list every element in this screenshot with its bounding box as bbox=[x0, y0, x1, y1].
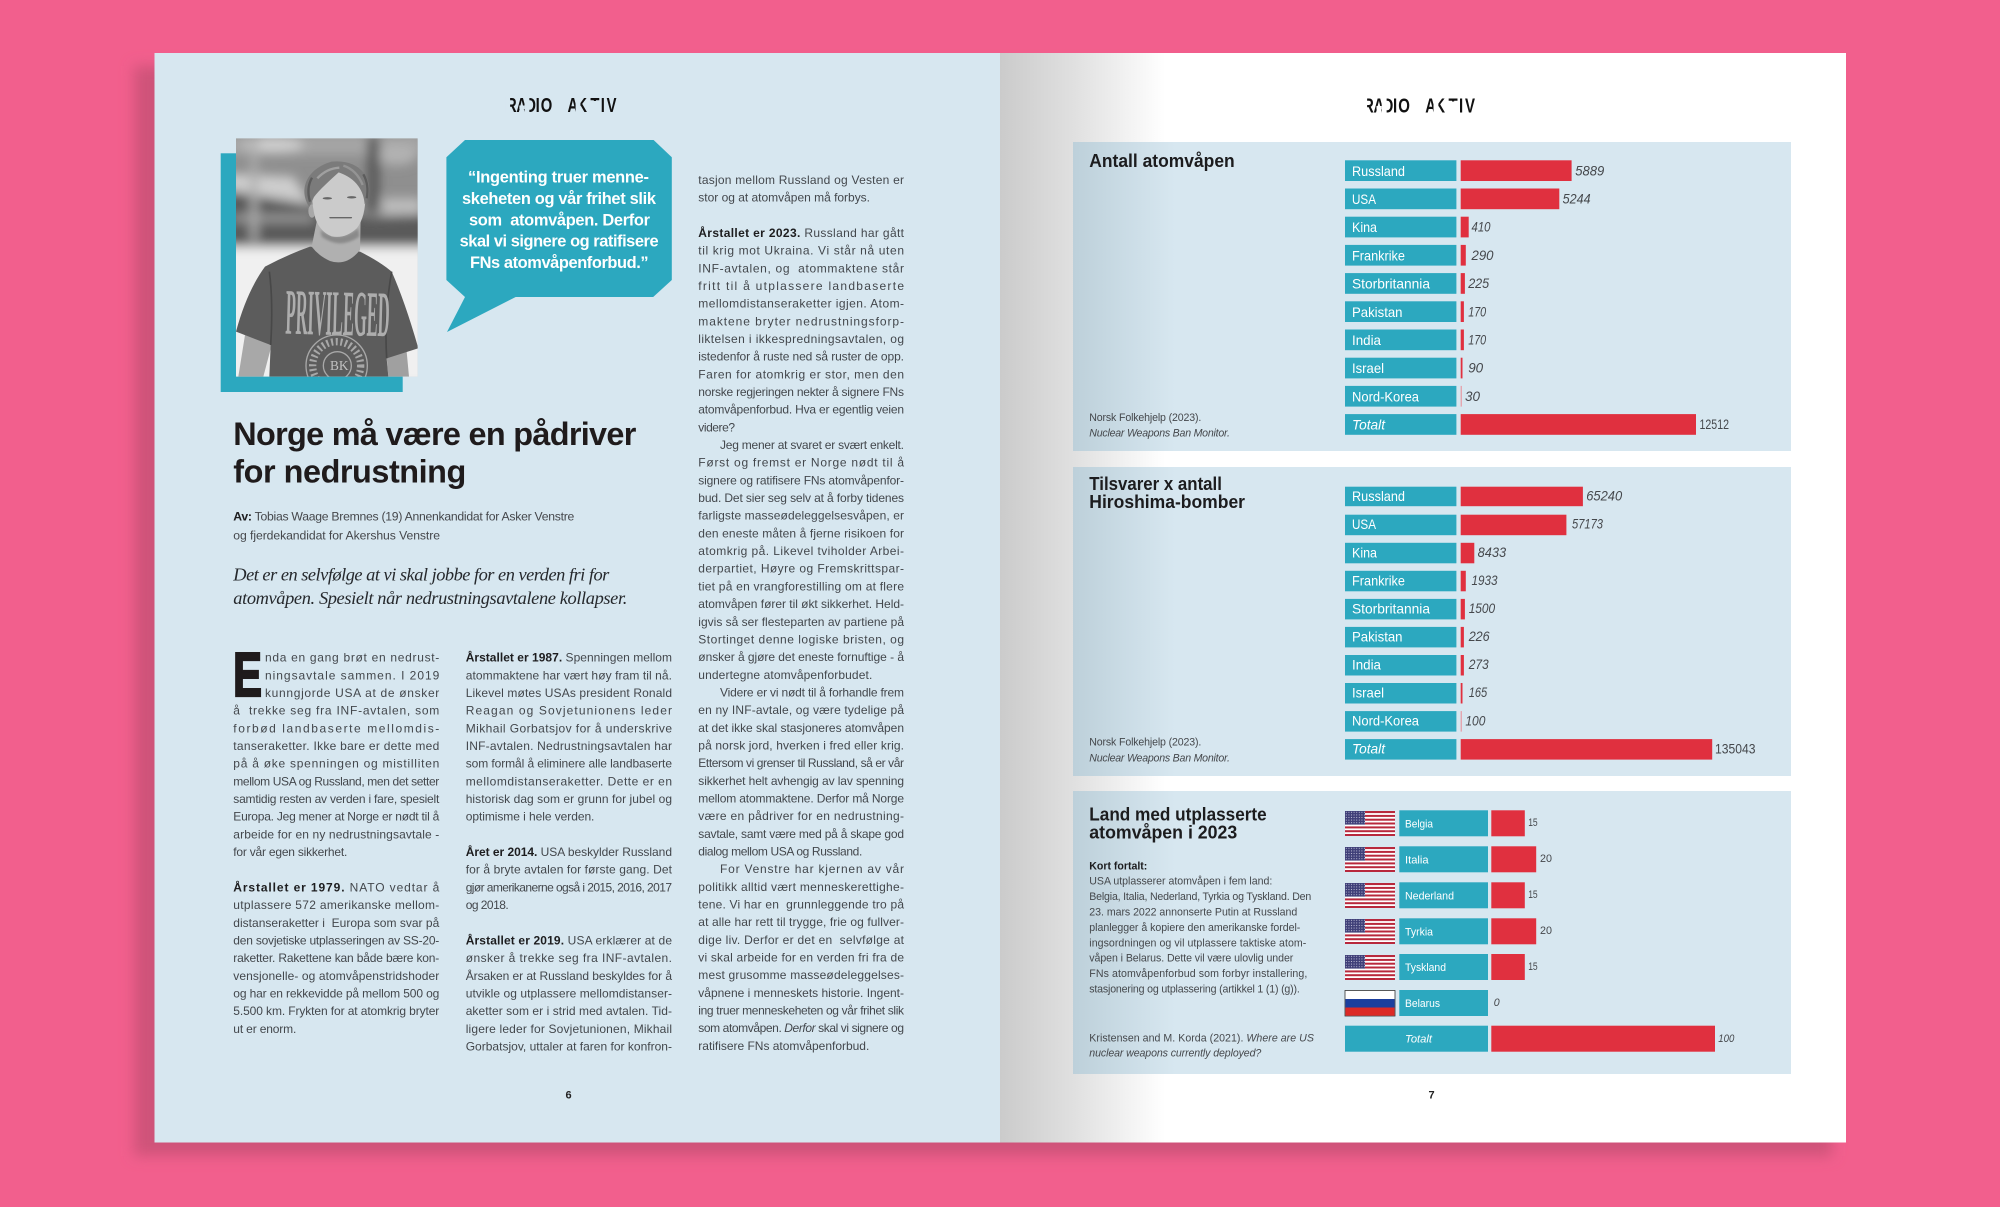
row: Kina 410 bbox=[1345, 217, 1491, 237]
portrait backing block bbox=[221, 153, 403, 392]
article column 3: tene. Vi har en grunnleggende tro på bbox=[698, 898, 904, 912]
row: Italia 20 bbox=[1345, 846, 1552, 872]
eyes and smile bbox=[323, 196, 356, 199]
row: Italia 20: Italia bbox=[1405, 854, 1429, 866]
row: Israel 165: 165 bbox=[1469, 685, 1488, 700]
article column 3: som atomvåpen. Derfor skal vi signere og bbox=[698, 1021, 904, 1035]
row: Tyskland 15: Tyskland bbox=[1405, 962, 1446, 974]
article column 3: fritt til å utplassere landbaserte bbox=[698, 279, 904, 293]
article column 3: Årstallet er 2023. Russland har gått bbox=[698, 225, 905, 240]
row: Frankrike 1933: 1933 bbox=[1472, 573, 1498, 588]
article column 1: raketter. Rakettene kan både bære kon- bbox=[233, 951, 439, 965]
row: Tyrkia 20 bbox=[1345, 918, 1552, 944]
article column 3: stor og at atomvåpen må forbys. bbox=[698, 191, 870, 205]
row: Frankrike 290: Frankrike bbox=[1352, 247, 1405, 263]
row: Totalt 100: Totalt bbox=[1405, 1034, 1433, 1046]
article column 3: Jeg mener at svaret er svært enkelt. bbox=[720, 438, 904, 452]
article column 1: ningsavtale sammen. I 2019 bbox=[265, 668, 440, 682]
right page bbox=[1000, 53, 1846, 1142]
article column 2: Året er 2014. USA beskylder Russland bbox=[466, 844, 672, 859]
row: India 170 bbox=[1345, 330, 1487, 350]
article column 1: vensjonelle- og atomvåpenstridshoder bbox=[233, 969, 439, 983]
row: Storbritannia 1500 bbox=[1345, 599, 1496, 619]
text: Kort fortalt: 23. mars 2022 annonserte Putin at Russland bbox=[1089, 906, 1297, 918]
lead paragraph bbox=[232, 565, 627, 608]
article column 2: Gorbatsjov, uttaler at faren for konfron- bbox=[466, 1039, 672, 1053]
row: Israel 165 bbox=[1345, 683, 1488, 704]
hair bbox=[304, 161, 369, 207]
magazine shadow bbox=[134, 66, 1832, 1156]
shirt crest bbox=[305, 334, 368, 377]
drop cap: E bbox=[233, 641, 262, 710]
text: Kort fortalt: FNs atomvåpenforbud som forbyr installering, bbox=[1089, 968, 1307, 980]
row: Russland 5889 bbox=[1345, 160, 1605, 181]
article column 2: Årsaken er at Russland beskyldes for å bbox=[466, 968, 672, 983]
row: Tyrkia 20: Tyrkia bbox=[1405, 926, 1434, 938]
article column 3: ing truer menneskeheten og vår frihet slik bbox=[698, 1004, 905, 1018]
article column 1: 5.500 km. Frykten for at atomkrig bryter bbox=[233, 1004, 439, 1018]
row: Belgia 15: 15 bbox=[1528, 817, 1538, 829]
row: Totalt 100: 100 bbox=[1718, 1033, 1734, 1045]
article column 1: ut er enorm. bbox=[233, 1022, 296, 1036]
row: Russland 65240: Russland bbox=[1352, 488, 1405, 504]
quote bubble: FNs atomvåpenforbud.” bbox=[470, 254, 649, 272]
article column 3: derpartiet, Høyre og Fremskrittspar- bbox=[698, 562, 904, 576]
text: Kort fortalt: ingsordningen og vil utplassere taktiske atom- bbox=[1089, 937, 1307, 949]
article column 2: ønsker å trekke seg fra INF-avtalen. bbox=[466, 951, 672, 965]
panel: Land med utplasserte atomvåpen i 2023: Land med utplasserte bbox=[1089, 804, 1267, 825]
article column 3: savtale, samt være med på å skape god bbox=[698, 827, 904, 841]
row: Frankrike 1933 bbox=[1345, 571, 1498, 591]
row: Totalt 12512 bbox=[1345, 414, 1729, 435]
article column 2: som formål å eliminere alle landbaserte bbox=[466, 757, 672, 771]
row: Russland 5889: 5889 bbox=[1575, 163, 1605, 178]
hair strands bbox=[308, 166, 367, 202]
row: Russland 5889: Russland bbox=[1352, 163, 1405, 179]
row: Frankrike 1933: Frankrike bbox=[1352, 572, 1405, 588]
article column 3: mellomdistanseraketter igjen. Atom- bbox=[698, 297, 904, 311]
article column 3: maktene bryter nedrustningsforp- bbox=[698, 314, 904, 328]
row: Tyrkia 20: 20 bbox=[1540, 925, 1552, 937]
row: Tyskland 15 bbox=[1345, 954, 1538, 980]
row: Pakistan 226 bbox=[1345, 627, 1490, 647]
masthead left: Radio Aktiv: RADIOAKTIV bbox=[506, 94, 617, 117]
row: Kina 8433: Kina bbox=[1352, 544, 1377, 560]
article column 3: videre? bbox=[698, 420, 735, 434]
article column 1: kunngjorde USA at de ønsker bbox=[265, 686, 439, 700]
row: Totalt 135043: 135043 bbox=[1715, 741, 1756, 756]
article column 3: atomvåpen fører til økt sikkerhet. Held- bbox=[698, 597, 904, 611]
source note bbox=[1089, 737, 1230, 764]
row: USA 57173: 57173 bbox=[1572, 517, 1603, 532]
article column 3: politikk alltid vært menneskerettighe- bbox=[698, 880, 904, 894]
text: Kort fortalt bbox=[1089, 860, 1311, 996]
row: India 170: India bbox=[1352, 332, 1381, 348]
panel: Land med utplasserte atomvåpen i 2023: atomvåpen i 2023 bbox=[1089, 822, 1237, 843]
row: Totalt 12512: 12512 bbox=[1700, 417, 1729, 432]
row: Italia 20: 20 bbox=[1540, 853, 1552, 865]
article column 3: at alle har rett til trygge, frie og fullver- bbox=[698, 915, 904, 929]
article column 3: tasjon mellom Russland og Vesten er bbox=[698, 173, 904, 187]
article column 3: norske regjeringen nekter å signere FNs bbox=[698, 385, 904, 399]
row: Israel 90: Israel bbox=[1352, 360, 1384, 376]
article column 1: utplassere 572 amerikanske mellom- bbox=[233, 898, 439, 912]
text: Kort fortalt: USA utplasserer atomvåpen i fem land: bbox=[1089, 876, 1272, 888]
source note: Nuclear Weapons Ban Monitor. bbox=[1089, 428, 1230, 440]
masthead right: Radio Aktiv: RADIOAKTIV bbox=[1363, 94, 1475, 117]
row: Pakistan 226: 226 bbox=[1468, 629, 1490, 644]
article column 2: Årstallet er 2019. USA erklærer at de bbox=[466, 932, 672, 947]
sleeve seams bbox=[269, 272, 392, 358]
text: Kort fortalt: Kort fortalt: bbox=[1089, 860, 1147, 872]
article column 3: istedenfor å ruste ned så ruster de opp. bbox=[698, 350, 904, 364]
article column 2: ligere leder for Sovjetunionen, Mikhail bbox=[466, 1022, 672, 1036]
row: Nord-Korea 30: 30 bbox=[1465, 389, 1480, 404]
article column 2: og 2018. bbox=[466, 898, 509, 912]
page number 7: 7 bbox=[1428, 1090, 1435, 1102]
row: Russland 65240 bbox=[1345, 487, 1623, 506]
article column 2: Mikhail Gorbatsjov for å underskrive bbox=[466, 721, 672, 735]
row: USA 5244: 5244 bbox=[1563, 192, 1591, 206]
article column 3: ratifisere FNs atomvåpenforbud. bbox=[698, 1039, 869, 1053]
article column 3: atomkrig på. Likevel tviholder Arbei- bbox=[698, 544, 904, 558]
article column 3: sikkerhet helt avhengig av lav spenning bbox=[698, 774, 904, 788]
row: Pakistan 170: 170 bbox=[1468, 304, 1487, 319]
panel: Land med utplasserte atomvåpen i 2023 bbox=[1073, 791, 1791, 1074]
article column 3: tiet på en vrangforestilling om at flere bbox=[698, 579, 904, 593]
face bbox=[312, 172, 365, 237]
row: Israel 90: 90 bbox=[1468, 361, 1484, 376]
article column 1 bbox=[233, 651, 440, 1036]
article column 3: mest grusomme masseødeleggelses- bbox=[698, 968, 904, 982]
row: Storbritannia 225: 225 bbox=[1467, 276, 1490, 291]
article column 3: på norsk jord, hverken i fred eller krig. bbox=[698, 738, 904, 752]
row: Israel 90 bbox=[1345, 358, 1484, 378]
row: Belarus 0: Belarus bbox=[1405, 998, 1440, 1010]
row: India 273: India bbox=[1352, 656, 1381, 672]
row: Kina 8433: 8433 bbox=[1478, 545, 1507, 560]
article column 3: Videre er vi nødt til å forhandle frem bbox=[720, 685, 904, 699]
row: USA 5244 bbox=[1345, 188, 1591, 209]
row: Pakistan 170 bbox=[1345, 301, 1487, 322]
article column 2: gjør amerikanerne også i 2015, 2016, 2017 bbox=[466, 880, 672, 894]
article column 2: aketter som er i strid med avtalen. Tid- bbox=[466, 1004, 672, 1018]
row: Pakistan 170: Pakistan bbox=[1352, 304, 1402, 320]
article column 2: Likevel møtes USAs president Ronald bbox=[466, 686, 672, 700]
lead paragraph: atomvåpen. Spesielt når nedrustningsavtalene kollapser. bbox=[233, 588, 627, 608]
article column 2: optimisme i hele verden. bbox=[466, 810, 594, 824]
article column 3: være en pådriver for en nedrustning- bbox=[698, 809, 904, 823]
article column 1: å trekke seg fra INF-avtalen, som bbox=[233, 704, 439, 718]
row: Nord-Korea 100 bbox=[1345, 711, 1486, 732]
row: Kina 8433 bbox=[1345, 543, 1507, 563]
panel: Tilsvarer x antall Hiroshima-bomber: Tilsvarer x antall bbox=[1089, 473, 1222, 494]
left arm bbox=[238, 335, 272, 377]
article column 3: dialog mellom USA og Russland. bbox=[698, 844, 862, 858]
row: Storbritannia 1500: 1500 bbox=[1469, 601, 1496, 616]
article column 3: Ettersom vi grenser til Russland, så er vår bbox=[698, 756, 904, 770]
article column 1: og har en rekkevidde på mellom 500 og bbox=[233, 986, 439, 1000]
title: Norge må være en pådriver bbox=[233, 416, 637, 452]
article column 2: mellomdistanseraketter. Dette er en bbox=[466, 774, 672, 788]
text: Kort fortalt: planlegger å kopiere den amerikanske fordel- bbox=[1089, 922, 1301, 934]
row: Kina 410: Kina bbox=[1352, 219, 1377, 235]
right arm bbox=[387, 352, 409, 377]
row: Belarus 0: 0 bbox=[1494, 997, 1500, 1009]
article column 2: for å bryte avtalen for første gang. Det bbox=[466, 863, 673, 877]
row: Kina 410: 410 bbox=[1472, 220, 1491, 235]
panel: Tilsvarer x antall Hiroshima-bomber: Hiroshima-bomber bbox=[1089, 491, 1245, 512]
panel: Tilsvarer x antall Hiroshima-bomber bbox=[1073, 467, 1791, 776]
article column 3: vi skal arbeide for en verden fri fra de bbox=[698, 950, 904, 964]
source note bbox=[1089, 412, 1230, 440]
article column 2: atommaktene har vært høy fram til nå. bbox=[466, 668, 672, 682]
byline: og fjerdekandidat for Akershus Venstre bbox=[233, 528, 440, 542]
article column 3: igvis så ser flesteparten av partiene på bbox=[698, 615, 904, 629]
byline: Av: Tobias Waage Bremnes (19) Annenkandidat for Asker Venstre bbox=[233, 510, 575, 524]
article column 3: mellom atommaktene. Derfor må Norge bbox=[698, 792, 904, 806]
row: Tyskland 15: 15 bbox=[1528, 961, 1538, 973]
row: Israel 165: Israel bbox=[1352, 684, 1384, 700]
article column 3: den eneste måten å fjerne risikoen for bbox=[698, 526, 904, 540]
article column 1: tanseraketter. Ikke bare er dette med bbox=[233, 739, 439, 753]
article column 1: distanseraketter i Europa som svar på bbox=[233, 916, 440, 930]
neck bbox=[312, 218, 361, 262]
article column 2: INF-avtalen. Nedrustningsavtalen har bbox=[466, 739, 672, 753]
article column 3: Stortinget denne logiske bristen, og bbox=[698, 632, 904, 646]
row: USA 5244: USA bbox=[1352, 191, 1377, 207]
row: Frankrike 290: 290 bbox=[1471, 248, 1494, 263]
text: Kort fortalt: Belgia, Italia, Nederland, Tyrkia og Tyskland. Den bbox=[1089, 891, 1311, 903]
article column 3: atomvåpenforbud. Hva er egentlig veien bbox=[698, 403, 904, 417]
article column 3: bud. Det sier seg selv at å forby tidenes bbox=[698, 491, 904, 505]
article column 2: utvikle og utplassere mellomdistanser- bbox=[466, 986, 672, 1000]
left page bbox=[154, 53, 1000, 1142]
text: PRIVILEGED bbox=[285, 277, 391, 351]
t-shirt bbox=[236, 247, 418, 377]
article column 1: Europa. Jeg mener at Norge er nødt til å bbox=[233, 810, 440, 824]
text: Kort fortalt: stasjonering og utplassering (artikkel 1 (1) (g)). bbox=[1089, 984, 1300, 996]
row: India 273 bbox=[1345, 655, 1489, 676]
source note bbox=[1089, 1033, 1314, 1060]
article column 1: samtidig resten av verden i fare, spesielt bbox=[233, 792, 440, 806]
panel: Antall atomvåpen: Antall atomvåpen bbox=[1089, 150, 1235, 171]
text: Kort fortalt: våpen i Belarus. Dette vil være ulovlig under bbox=[1089, 953, 1294, 965]
row: Nord-Korea 30 bbox=[1345, 386, 1480, 407]
row: Frankrike 290 bbox=[1345, 245, 1494, 266]
row: Belgia 15: Belgia bbox=[1405, 818, 1434, 830]
quote bubble: skal vi signere og ratifisere bbox=[460, 233, 659, 251]
source note: nuclear weapons currently deployed? bbox=[1089, 1048, 1261, 1060]
row: Totalt 100 bbox=[1345, 1026, 1734, 1052]
row: Nord-Korea 100: 100 bbox=[1465, 713, 1486, 728]
article column 3: For Venstre har kjernen av vår bbox=[720, 862, 904, 876]
article column 3: Faren for atomkrig er stor, men den bbox=[698, 367, 904, 381]
article column 1: for vår egen sikkerhet. bbox=[233, 845, 347, 859]
row: Russland 65240: 65240 bbox=[1586, 488, 1623, 503]
row: Totalt 135043 bbox=[1345, 739, 1756, 760]
row: Belarus 0 bbox=[1345, 990, 1500, 1016]
row: Nederland 15: 15 bbox=[1528, 889, 1538, 901]
quote bubble: skeheten og vår frihet slik bbox=[462, 190, 657, 208]
chin shadow bbox=[321, 228, 359, 243]
row: Nederland 15: Nederland bbox=[1405, 890, 1454, 902]
article column 1: på å øke spenningen og mistilliten bbox=[233, 757, 439, 771]
article column 3: dige liv. Derfor er det en selvfølge at bbox=[698, 933, 905, 947]
article column 1: arbeide for en ny nedrustningsavtale - bbox=[233, 827, 439, 841]
row: Totalt 135043: Totalt bbox=[1352, 741, 1386, 757]
article column 1: den sovjetiske utplasseringen av SS-20- bbox=[233, 933, 439, 947]
portrait photo: BK bbox=[330, 358, 349, 373]
portrait photo bbox=[236, 138, 418, 377]
article column 2: Reagan og Sovjetunionens leder bbox=[466, 704, 672, 718]
title: for nedrustning bbox=[233, 454, 466, 490]
article column 3: Først og fremst er Norge nødt til å bbox=[698, 456, 904, 470]
row: India 170: 170 bbox=[1468, 332, 1487, 348]
article column 3: en ny INF-avtale, og være tydelige på bbox=[698, 703, 904, 717]
article column 1: forbød landbaserte mellomdis- bbox=[233, 721, 439, 735]
article column 3: ønsker å gjøre det eneste fornuftige - å bbox=[698, 650, 904, 664]
article column 1: nda en gang brøt en nedrust- bbox=[265, 651, 439, 665]
article column 3: undertegne atomvåpenforbudet. bbox=[698, 668, 872, 682]
ear bbox=[308, 204, 314, 218]
row: Nord-Korea 30: Nord-Korea bbox=[1352, 388, 1419, 404]
article column 2: historisk dag som er grunn for jubel og bbox=[466, 792, 672, 806]
row: Totalt 12512: Totalt bbox=[1352, 417, 1386, 433]
source note: Norsk Folkehjelp (2023). bbox=[1089, 412, 1201, 424]
article column 2 bbox=[466, 650, 673, 1053]
quote bubble: som atomvåpen. Derfor bbox=[469, 211, 651, 229]
article column 3: signere og ratifisere FNs atomvåpenfor- bbox=[698, 473, 904, 487]
row: Storbritannia 1500: Storbritannia bbox=[1352, 600, 1430, 616]
page number 6: 6 bbox=[566, 1090, 572, 1102]
quote bubble bbox=[446, 140, 672, 332]
title bbox=[233, 416, 637, 490]
quote bubble: “Ingenting truer menne- bbox=[468, 169, 649, 187]
panel: Antall atomvåpen bbox=[1073, 142, 1791, 451]
lead paragraph: Det er en selvfølge at vi skal jobbe for en verden fri for bbox=[232, 565, 610, 585]
article column 1: Årstallet er 1979. NATO vedtar å bbox=[233, 879, 440, 894]
row: Belgia 15 bbox=[1345, 810, 1538, 836]
row: Pakistan 226: Pakistan bbox=[1352, 628, 1402, 644]
byline bbox=[233, 510, 575, 542]
source note: Kristensen and M. Korda (2021). Where are US bbox=[1089, 1033, 1314, 1045]
row: Nederland 15 bbox=[1345, 882, 1538, 908]
article column 3: INF-avtalen, og atommaktene står bbox=[698, 261, 904, 275]
row: USA 57173: USA bbox=[1352, 516, 1377, 532]
row: Nord-Korea 100: Nord-Korea bbox=[1352, 713, 1419, 729]
article column 3: våpnene i menneskets historie. Ingent- bbox=[698, 986, 904, 1000]
article column 3: at det ikke skal stasjoneres atomvåpen bbox=[698, 721, 904, 735]
row: USA 57173 bbox=[1345, 515, 1603, 535]
source note: Norsk Folkehjelp (2023). bbox=[1089, 737, 1201, 749]
article column 3: til krig mot Ukraina. Vi står nå uten bbox=[698, 244, 904, 258]
article column 3: liktelsen i ikkespredningsavtalen, og bbox=[698, 332, 904, 346]
row: India 273: 273 bbox=[1468, 657, 1489, 672]
source note: Nuclear Weapons Ban Monitor. bbox=[1089, 752, 1230, 764]
article column 3 bbox=[698, 173, 905, 1053]
row: Storbritannia 225 bbox=[1345, 273, 1490, 294]
article column 2: Årstallet er 1987. Spenningen mellom bbox=[466, 650, 672, 665]
article column 3: farligste masseødeleggelsesvåpen, er bbox=[698, 509, 904, 523]
article column 1: mellom USA og Russland, men det setter bbox=[233, 774, 439, 788]
row: Storbritannia 225: Storbritannia bbox=[1352, 276, 1430, 292]
